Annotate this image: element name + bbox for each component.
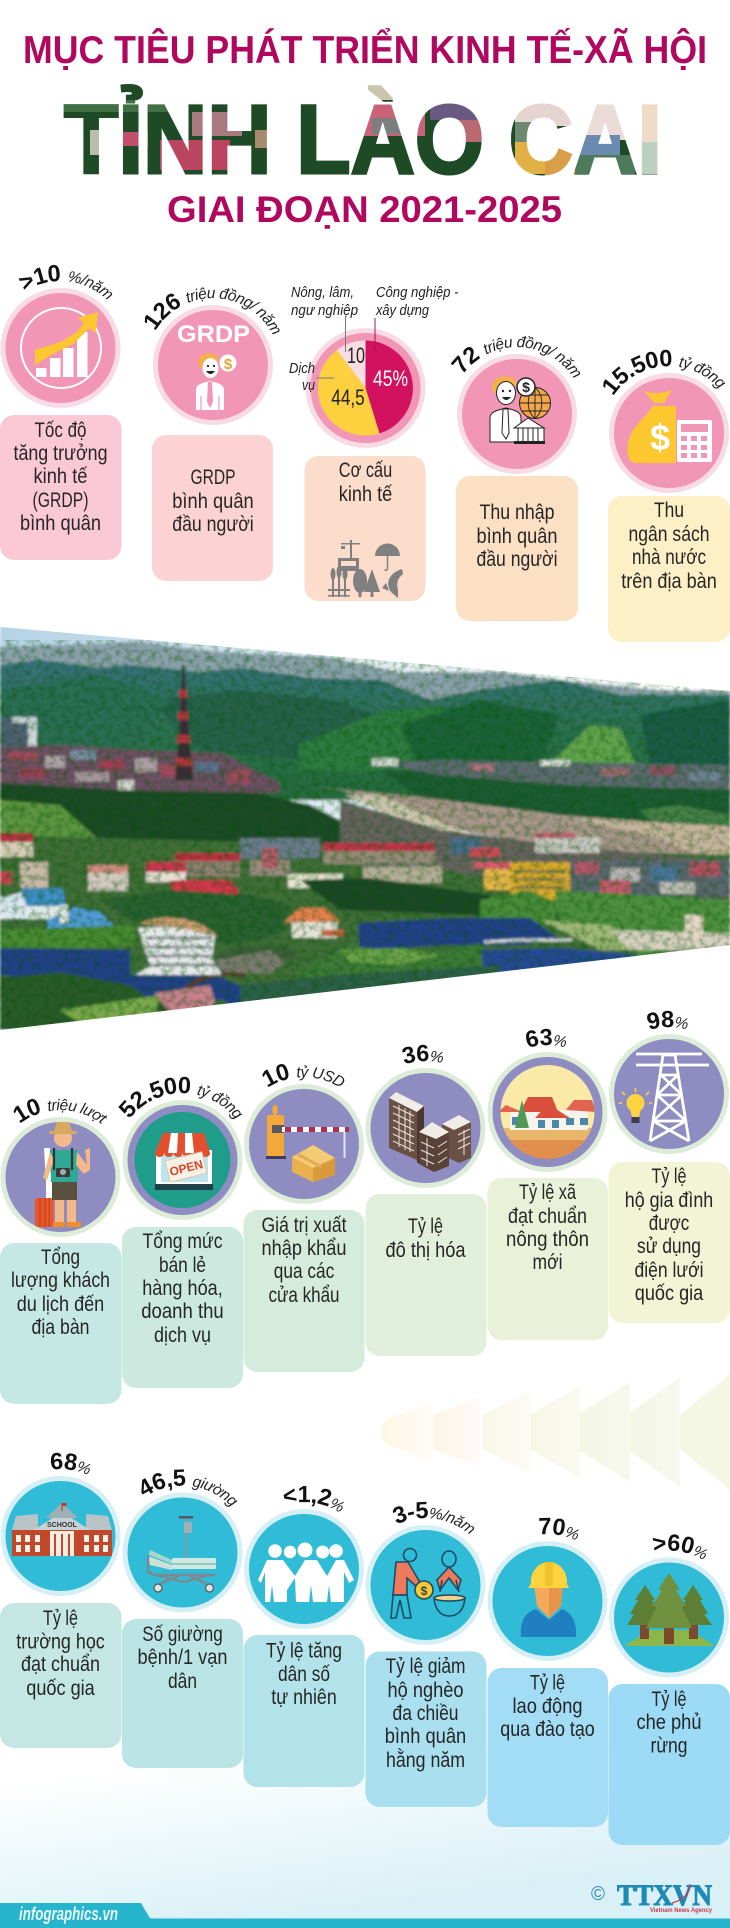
title xyxy=(23,27,707,230)
card text: nông thôn xyxy=(506,1228,589,1251)
tower xyxy=(175,665,193,780)
card text: đầu người xyxy=(172,513,254,536)
title line 2: photo-filled: TỈNH LÀO CAI xyxy=(64,85,662,194)
card xyxy=(608,496,730,642)
pie legend labels: Dịch xyxy=(289,360,315,377)
value: 68%: 68% xyxy=(50,1452,91,1474)
card text xyxy=(16,1607,105,1700)
circle xyxy=(366,1525,486,1645)
card text: dân xyxy=(168,1670,197,1693)
card xyxy=(152,435,273,581)
icon: hospital bed xyxy=(148,1516,216,1592)
circle xyxy=(366,1068,486,1188)
card text: đạt chuẩn xyxy=(21,1653,100,1676)
circle xyxy=(0,1117,120,1237)
panel: GRDP growth xyxy=(0,264,122,560)
card xyxy=(0,1603,122,1748)
card text xyxy=(141,1230,224,1347)
value: 3-5%/năm: 3-5%/năm xyxy=(392,1502,474,1534)
panel: standard schools xyxy=(0,1452,122,1748)
card text xyxy=(636,1688,702,1758)
arch bridge xyxy=(182,973,245,993)
hills and vegetation xyxy=(0,783,730,1030)
pie legend labels: xây dựng xyxy=(375,302,430,319)
card xyxy=(456,476,578,621)
lakes xyxy=(0,918,640,1000)
footbridge xyxy=(484,940,572,942)
card text: kinh tế xyxy=(339,483,393,506)
card text xyxy=(339,459,393,506)
panel: grid electricity xyxy=(608,1010,730,1323)
card text: Tốc độ xyxy=(34,419,86,442)
circle xyxy=(0,288,120,408)
pie chart: 10 xyxy=(347,343,365,368)
icon: money bag and calculator: $ xyxy=(650,417,670,458)
card text xyxy=(506,1181,589,1274)
card text: Tỷ lệ xyxy=(530,1672,565,1694)
card text: bán lẻ xyxy=(159,1254,206,1277)
card text: nhập khẩu xyxy=(262,1237,346,1260)
card text xyxy=(385,1655,466,1772)
circle xyxy=(122,1492,242,1612)
curved hotel xyxy=(135,917,222,975)
icon: growth chart xyxy=(21,308,101,388)
value: 46,5 giường: 46,5 giường xyxy=(141,1469,238,1507)
icon: border barrier and box xyxy=(266,1105,349,1182)
lower foreground xyxy=(0,965,500,1030)
source: infographics.vn: infographics.vn xyxy=(19,1904,118,1924)
card text: Tổng mức xyxy=(142,1230,222,1253)
card text: qua các xyxy=(274,1260,334,1283)
card text: hằng năm xyxy=(386,1749,465,1772)
value: >10 %/năm: >10 %/năm xyxy=(18,264,112,300)
card text: trên địa bàn xyxy=(621,570,717,593)
card xyxy=(488,1668,608,1827)
icon: worker xyxy=(521,1562,576,1637)
card xyxy=(608,1162,730,1323)
footer bar xyxy=(0,1903,730,1928)
card text: mới xyxy=(532,1251,562,1274)
icon: people xyxy=(258,1542,354,1602)
icon: GRDP person: $ xyxy=(224,356,233,373)
card text: hộ gia đình xyxy=(625,1189,713,1212)
card text: lượng khách xyxy=(11,1269,110,1292)
card text xyxy=(621,499,717,593)
panel: natural population growth xyxy=(244,1486,364,1787)
icon: buildings xyxy=(389,1092,471,1172)
card text: du lịch đến xyxy=(17,1293,104,1316)
card text: đô thị hóa xyxy=(386,1239,466,1262)
icon: donor and recipient: $ xyxy=(421,1584,428,1598)
building: left tower block xyxy=(2,717,37,748)
background xyxy=(0,1640,730,1928)
card text: nhà nước xyxy=(632,546,706,569)
value: 52.500 tỷ đồng: 52.500 tỷ đồng xyxy=(118,1076,242,1120)
card text: điện lưới xyxy=(634,1259,704,1282)
logo: TTXVN: Vietnam News Agency xyxy=(650,1907,712,1914)
card text: Cơ cấu xyxy=(339,459,392,482)
pie legend labels: Nông, lâm, xyxy=(291,284,354,301)
panel: retail xyxy=(118,1076,243,1388)
title line 3: GIAI ĐOẠN 2021-2025 xyxy=(167,188,562,230)
value: 36%: 36% xyxy=(402,1044,443,1064)
value: 98%: 98% xyxy=(647,1010,688,1029)
card text: Tỷ lệ xyxy=(408,1215,443,1238)
panel: hospital beds xyxy=(122,1469,243,1768)
panel: import-export xyxy=(244,1064,364,1372)
icon: money bag and calculator xyxy=(627,390,712,463)
card text: Tỷ lệ xyxy=(43,1607,78,1630)
card xyxy=(366,1194,486,1356)
card text: bình quân xyxy=(476,525,558,548)
pie chart: 45% xyxy=(373,366,408,391)
value: 72 triệu đồng/ năm: 72 triệu đồng/ năm xyxy=(450,336,580,378)
card text: bình quân xyxy=(20,512,101,535)
pie legend labels xyxy=(289,284,459,394)
card text: Thu nhập xyxy=(480,501,554,524)
card text: sử dụng xyxy=(637,1235,701,1258)
card text: Số giường xyxy=(142,1623,223,1646)
card text: bệnh/1 vạn xyxy=(138,1646,228,1669)
card xyxy=(122,1227,243,1388)
circle xyxy=(488,1052,608,1172)
panel: forest coverage xyxy=(608,1534,730,1845)
icon: forest xyxy=(624,1573,715,1646)
icon: rural scene xyxy=(498,1064,596,1160)
card xyxy=(0,1243,122,1404)
card text: đa chiều xyxy=(392,1702,458,1725)
card xyxy=(122,1619,243,1768)
card text: kinh tế xyxy=(34,465,88,488)
panel: income per capita xyxy=(450,336,580,621)
card text: quốc gia xyxy=(26,1677,95,1700)
panel: economic structure xyxy=(289,284,459,601)
card text: bình quân xyxy=(385,1725,466,1748)
card xyxy=(304,456,426,601)
card text xyxy=(266,1640,342,1709)
card text: bình quân xyxy=(172,490,254,513)
left city xyxy=(0,745,280,794)
panel: new rural communes xyxy=(488,1028,608,1340)
icon: tourist xyxy=(35,1122,90,1227)
icon: power tower and bulb xyxy=(619,1054,709,1141)
card text: Tổng xyxy=(41,1246,80,1269)
icon: GRDP person: GRDP xyxy=(177,321,250,348)
panel: state budget revenue xyxy=(603,350,730,642)
card xyxy=(0,415,122,560)
icon: person, globe and bank xyxy=(490,376,550,444)
panel: poverty reduction xyxy=(366,1502,486,1807)
circle xyxy=(153,305,273,425)
icon: donor and recipient xyxy=(391,1548,465,1618)
card text: doanh thu xyxy=(141,1300,224,1323)
logo: TTXVN: TTXVN xyxy=(617,1879,712,1912)
panel: urbanisation xyxy=(366,1044,486,1356)
value: 70%: 70% xyxy=(539,1518,579,1540)
circle xyxy=(609,1034,729,1154)
island garden xyxy=(296,942,484,978)
buildings xyxy=(0,833,730,932)
card text: dịch vụ xyxy=(154,1324,211,1347)
icon: school: SCHOOL xyxy=(47,1522,78,1529)
icon: open shop: OPEN xyxy=(168,1157,204,1179)
card text xyxy=(262,1214,347,1307)
panel: GRDP per capita xyxy=(144,287,280,581)
card text xyxy=(500,1672,595,1741)
card text: cửa khẩu xyxy=(268,1284,340,1307)
pavilion xyxy=(284,908,344,938)
card text: rừng xyxy=(650,1734,688,1758)
circle xyxy=(244,1509,364,1629)
card text: được xyxy=(649,1212,689,1235)
pie leader lines xyxy=(316,317,375,378)
card text xyxy=(172,466,254,536)
card text: địa bàn xyxy=(32,1316,90,1339)
card text: Tỷ lệ xã xyxy=(519,1181,576,1204)
circle xyxy=(488,1541,608,1661)
card text: Tỷ lệ tăng xyxy=(266,1640,342,1662)
logo: TTXVN: © xyxy=(591,1884,605,1905)
right bank forest and city xyxy=(365,758,730,830)
card text: lao động xyxy=(512,1695,582,1718)
pie legend labels: Công nghiệp - xyxy=(376,284,459,301)
card xyxy=(366,1652,486,1807)
value: >60%: >60% xyxy=(652,1534,708,1559)
card xyxy=(244,1635,364,1787)
boat roof xyxy=(216,950,285,974)
pie chart xyxy=(318,340,413,436)
value: 15.500 tỷ đồng: 15.500 tỷ đồng xyxy=(603,350,726,395)
circle xyxy=(122,1100,242,1220)
card text: Thu xyxy=(654,499,684,522)
value: 10 tỷ USD: 10 tỷ USD xyxy=(262,1064,344,1087)
pie chart: 44,5 xyxy=(331,385,365,410)
icon: GRDP person xyxy=(177,321,250,410)
value: 126 triệu đồng/ năm: 126 triệu đồng/ năm xyxy=(144,287,280,334)
value: 63%: 63% xyxy=(526,1028,566,1047)
card text: Tỷ lệ giảm xyxy=(386,1655,466,1678)
card text: ngân sách xyxy=(628,523,710,546)
icon: open shop xyxy=(134,1112,230,1208)
panel: tourists xyxy=(0,1098,122,1404)
card text xyxy=(11,1246,110,1339)
card text xyxy=(138,1623,228,1693)
greens mid xyxy=(0,878,730,955)
circle xyxy=(609,373,729,493)
card text: Tỷ lệ xyxy=(652,1165,686,1188)
circle xyxy=(457,354,577,474)
card text: GRDP xyxy=(190,466,236,489)
card text: tự nhiên xyxy=(271,1686,337,1709)
card text: hàng hóa, xyxy=(142,1277,223,1300)
card xyxy=(488,1178,608,1340)
card text: qua đào tạo xyxy=(500,1718,595,1741)
card text xyxy=(14,419,108,535)
card text: quốc gia xyxy=(635,1282,704,1305)
decorative arrows xyxy=(381,1374,730,1490)
pie legend labels: vụ xyxy=(302,377,316,394)
card xyxy=(244,1210,364,1372)
circle xyxy=(306,328,426,448)
card xyxy=(608,1684,730,1845)
panel: photo of Lao Cai xyxy=(0,620,730,1040)
card text: đạt chuẩn xyxy=(508,1205,587,1228)
icon: school xyxy=(12,1503,112,1556)
circle xyxy=(0,1476,120,1596)
card text: Giá trị xuất xyxy=(262,1214,347,1237)
icons: sectors xyxy=(328,540,403,598)
pie legend labels: ngư nghiệp xyxy=(291,302,358,319)
card text: tăng trưởng xyxy=(14,442,108,465)
card text: đầu người xyxy=(476,548,558,571)
card text: hộ nghèo xyxy=(388,1679,464,1702)
value: <1,2%: <1,2% xyxy=(284,1486,344,1512)
circle xyxy=(609,1558,729,1678)
card text: che phủ xyxy=(636,1711,702,1734)
card text: trường học xyxy=(16,1630,105,1654)
panel: trained labour xyxy=(488,1518,608,1827)
card text: Tỷ lệ xyxy=(652,1688,686,1711)
card text: (GRDP) xyxy=(32,489,88,512)
circle xyxy=(244,1084,364,1204)
card text xyxy=(476,501,558,571)
value: 10 triệu lượt: 10 triệu lượt xyxy=(14,1098,108,1124)
icon: person, globe and bank: $ xyxy=(522,379,530,395)
card text xyxy=(386,1215,466,1262)
logo: TTXVN xyxy=(591,1879,712,1914)
card text: dân số xyxy=(278,1663,330,1686)
card text xyxy=(625,1165,713,1305)
photo texture xyxy=(0,640,730,1040)
river xyxy=(316,787,730,860)
